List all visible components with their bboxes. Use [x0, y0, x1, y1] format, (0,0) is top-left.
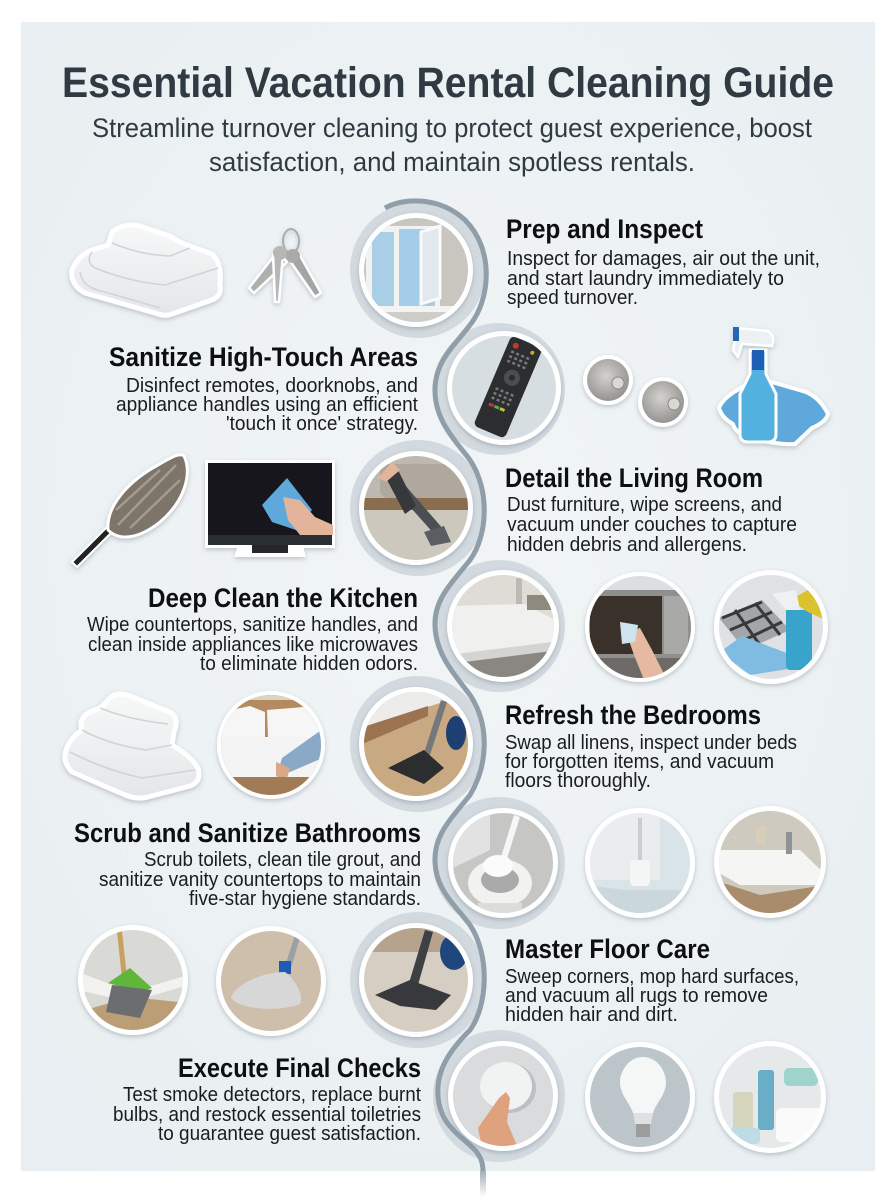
title: Essential Vacation Rental Cleaning Guide: [62, 59, 834, 107]
heading: Scrub and Sanitize Bathrooms: [74, 818, 421, 848]
icon: vacuum photo: [359, 450, 473, 568]
heading: Sanitize High-Touch Areas: [109, 342, 418, 372]
body text: Swap all linens, inspect under beds: [505, 732, 797, 754]
body text: speed turnover.: [507, 287, 638, 309]
subtitle: [92, 113, 813, 177]
icon: smoke detector photo: [448, 1041, 558, 1151]
body text: and start laundry immediately to: [507, 268, 784, 290]
icon: toilet photo: [448, 808, 559, 919]
icon: vanity photo: [714, 806, 826, 918]
spine fade tail: [480, 1171, 486, 1197]
body text: Inspect for damages, air out the unit,: [507, 248, 820, 270]
icon: doorknobs: [583, 355, 688, 427]
body text: five-star hygiene standards.: [189, 888, 421, 910]
heading: Prep and Inspect: [506, 214, 703, 244]
body text: [116, 375, 418, 435]
step 1: [72, 213, 820, 328]
step 4: [87, 570, 828, 684]
body text: Disinfect remotes, doorknobs, and: [126, 375, 418, 397]
step 8: [113, 1041, 826, 1153]
heading: Master Floor Care: [505, 934, 710, 964]
body text: [87, 614, 418, 675]
icon: towels: [72, 225, 220, 315]
icon: countertop photo: [447, 570, 559, 682]
icon: remote photo: [447, 331, 561, 445]
step 7: [78, 922, 799, 1038]
step 3: [72, 450, 797, 568]
body text: to eliminate hidden odors.: [200, 653, 418, 675]
body text: Scrub toilets, clean tile grout, and: [144, 849, 421, 871]
body text: [505, 966, 799, 1026]
subtitle: Streamline turnover cleaning to protect guest experience, boost: [92, 113, 813, 143]
icon: feather duster: [72, 455, 187, 567]
icon: stove and spray photo: [714, 570, 828, 684]
body text: 'touch it once' strategy.: [226, 413, 418, 435]
icon: keys: [249, 229, 321, 302]
step 6: [74, 806, 826, 919]
icon: shower brush photo: [585, 808, 695, 918]
body text: vacuum under couches to capture: [507, 514, 797, 536]
halo rings behind main circles: [350, 202, 565, 1162]
body text: appliance handles using an efficient: [116, 394, 418, 416]
heading: Execute Final Checks: [178, 1053, 421, 1083]
body text: [507, 494, 797, 556]
icon: vacuum on rug photo: [359, 922, 473, 1038]
body text: hidden debris and allergens.: [507, 534, 747, 556]
body text: and vacuum all rugs to remove: [505, 985, 768, 1007]
subtitle: satisfaction, and maintain spotless rentals.: [209, 147, 695, 177]
icon: folded linens: [65, 694, 199, 798]
body text: bulbs, and restock essential toiletries: [113, 1104, 421, 1126]
heading: Detail the Living Room: [505, 463, 763, 493]
body text: [99, 849, 421, 910]
heading: Deep Clean the Kitchen: [148, 583, 418, 613]
body text: Test smoke detectors, replace burnt: [123, 1084, 421, 1106]
body text: clean inside appliances like microwaves: [88, 634, 418, 656]
icon: window photo: [359, 213, 473, 328]
body text: Wipe countertops, sanitize handles, and: [87, 614, 418, 636]
body text: Sweep corners, mop hard surfaces,: [505, 966, 799, 988]
body text: [113, 1084, 421, 1145]
winding spine line: [385, 201, 486, 1172]
body text: Dust furniture, wipe screens, and: [507, 494, 782, 516]
icon: broom photo: [78, 925, 188, 1035]
body text: floors thoroughly.: [505, 770, 651, 792]
icon: spray bottle and cloth: [719, 327, 828, 444]
icon: vacuum under bed photo: [359, 687, 473, 801]
icon: light bulb photo: [585, 1042, 695, 1152]
body text: to guarantee guest satisfaction.: [158, 1123, 421, 1145]
icon: tv screen: [205, 460, 335, 557]
icon: toiletries photo: [714, 1041, 826, 1153]
body text: for forgotten items, and vacuum: [505, 751, 774, 773]
icon: mop photo: [216, 926, 326, 1036]
icon: microwave photo: [585, 572, 695, 682]
step 2: [109, 327, 828, 445]
body text: [507, 248, 820, 309]
heading: Refresh the Bedrooms: [505, 700, 761, 730]
step 5: [65, 687, 797, 801]
icon: bed sheets photo: [217, 691, 330, 799]
body text: [505, 732, 797, 792]
body text: sanitize vanity countertops to maintain: [99, 869, 421, 891]
body text: hidden hair and dirt.: [505, 1004, 678, 1026]
